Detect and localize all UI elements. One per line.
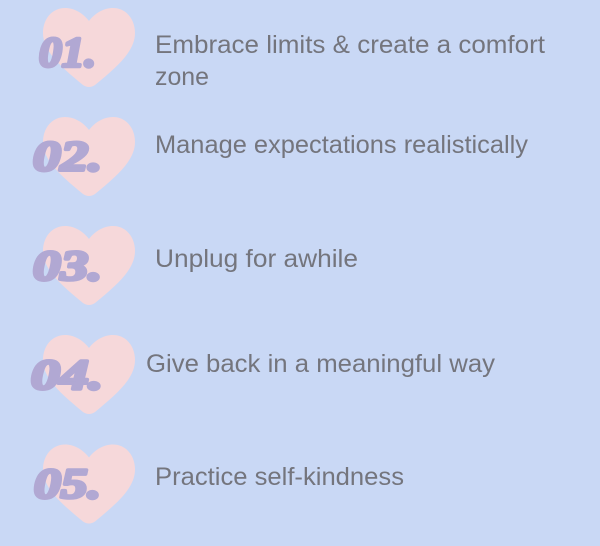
item 2 [33,117,529,196]
text: give back: Give back in a meaningful way [146,350,496,378]
icon: heart 1 [43,8,135,87]
item 4 [31,335,496,414]
item 3 [33,226,358,305]
text: embrace limits: zone [155,63,209,91]
icon: heart 2 [43,117,135,196]
text: manage expectations: Manage expectations realistically [155,131,529,159]
text: embrace limits: Embrace limits & create a comfort [155,31,545,59]
item 1 [39,8,545,91]
number 01: 01. [39,30,96,76]
item 5 [34,444,404,524]
text: unplug: Unplug for awhile [155,245,358,273]
text: practice self-kindness: Practice self-kindness [155,463,404,491]
number 04: 04. [31,353,103,399]
icon: heart 4 [43,335,135,414]
icon: heart 5 [43,444,135,524]
icon: heart 3 [43,226,135,305]
number 03: 03. [33,244,102,290]
number 05: 05. [34,462,101,508]
number 02: 02. [33,134,102,180]
